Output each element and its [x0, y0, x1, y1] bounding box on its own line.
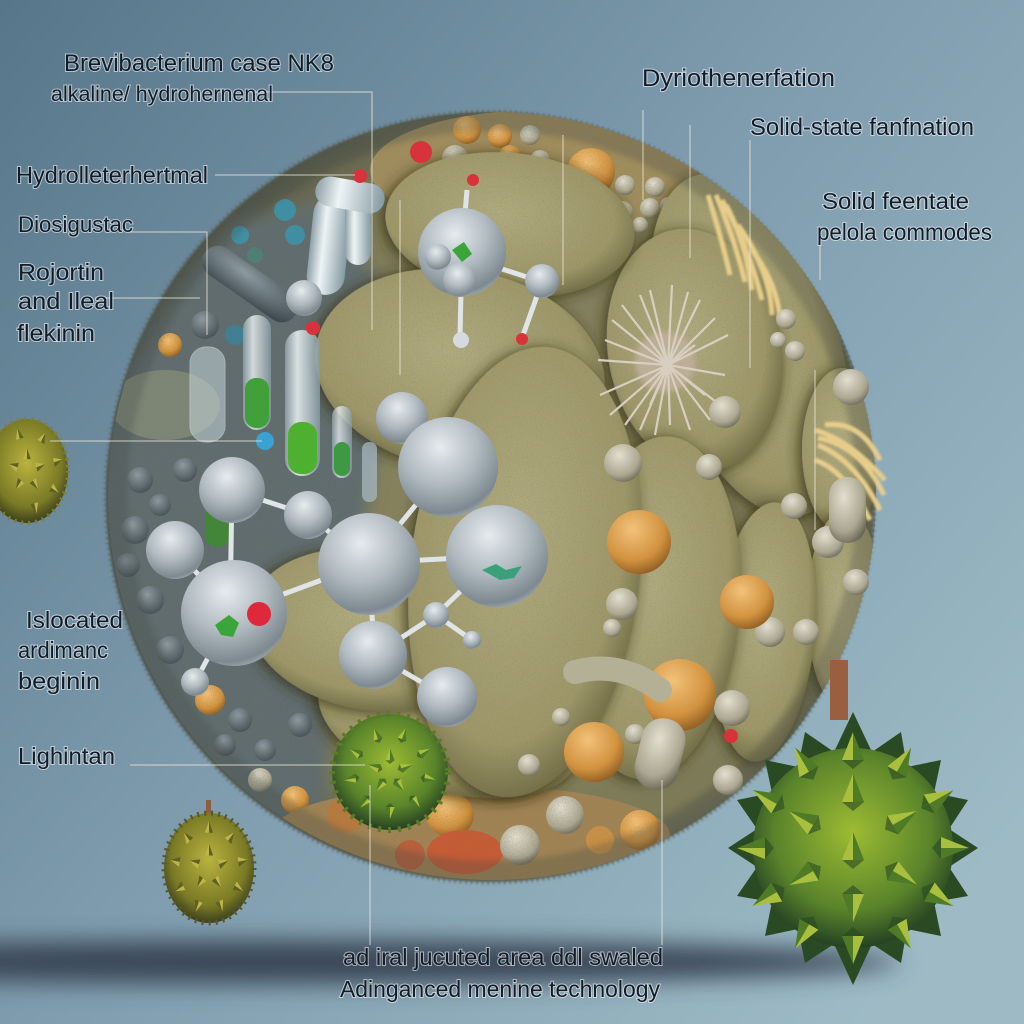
label: Solid feentate: pelola commodes: [817, 219, 992, 245]
label: Rojortin and Ileal Flekinin: and Ileal: [18, 288, 114, 314]
label: Rojortin and Ileal Flekinin: [17, 259, 114, 346]
test tubes: [190, 315, 377, 547]
label: Islocated ardimanc beginin: beginin: [18, 668, 100, 694]
molecule: upper: [353, 141, 559, 348]
large sphere: [90, 100, 900, 900]
durian: lower right: [728, 660, 978, 985]
molecule bonds: [175, 418, 497, 697]
label: Lighintan: Lighintan: [18, 743, 115, 769]
durian: lower left: [164, 800, 254, 923]
label: Brevibacterium case NK8: [51, 50, 334, 106]
region: upper granules: [370, 110, 710, 233]
label: bottom caption: ad iral jucuted area ddl swaled: [343, 944, 663, 970]
yellow fibres: [708, 195, 885, 520]
label: Brevibacterium case NK8: alkaline/ hydrohernenal: [51, 83, 273, 106]
region: left dark cellular edge: [108, 198, 382, 818]
label: bottom caption: Adinganced menine technology: [340, 976, 660, 1002]
label: Diosigustac: Diosigustac: [18, 212, 133, 237]
capsule cluster upper left: [196, 174, 387, 329]
label: Solid-state fanfination: Solid-state fanfnation: [750, 114, 974, 141]
label: Islocated ardimanc beginin: [18, 607, 123, 694]
white hairy tuft: [598, 285, 728, 435]
label: Solid feentate: Solid feentate: [822, 188, 969, 214]
molecule: lower: [146, 392, 548, 727]
label: Dyriothenerfation: Dyriothenerfation: [642, 65, 835, 92]
label: Rojortin and Ileal Flekinin: flekinin: [17, 320, 95, 346]
label: Brevibacterium case NK8: Brevibacterium case NK8: [64, 50, 334, 77]
region: main lobes: [236, 140, 889, 825]
floor band: [0, 940, 900, 984]
durian: left edge: [0, 419, 68, 523]
label: Islocated ardimanc beginin: ardimanc: [18, 637, 108, 663]
region: lower granules: [282, 789, 670, 880]
lobe speckle texture: [100, 100, 900, 900]
scattered spheres: [518, 309, 869, 795]
edge vignette: [114, 118, 870, 874]
durian: inside sphere: [332, 714, 448, 830]
label: Rojortin and Ileal Flekinin: Rojortin: [18, 259, 104, 285]
label: Solid feentate: [817, 188, 992, 245]
label: bottom caption: [340, 944, 663, 1002]
label: Hydrolleterhermal: Hydrolleterhertmal: [16, 162, 208, 188]
label: Islocated ardimanc beginin: Islocated: [26, 607, 123, 633]
leader lines: [50, 92, 820, 945]
